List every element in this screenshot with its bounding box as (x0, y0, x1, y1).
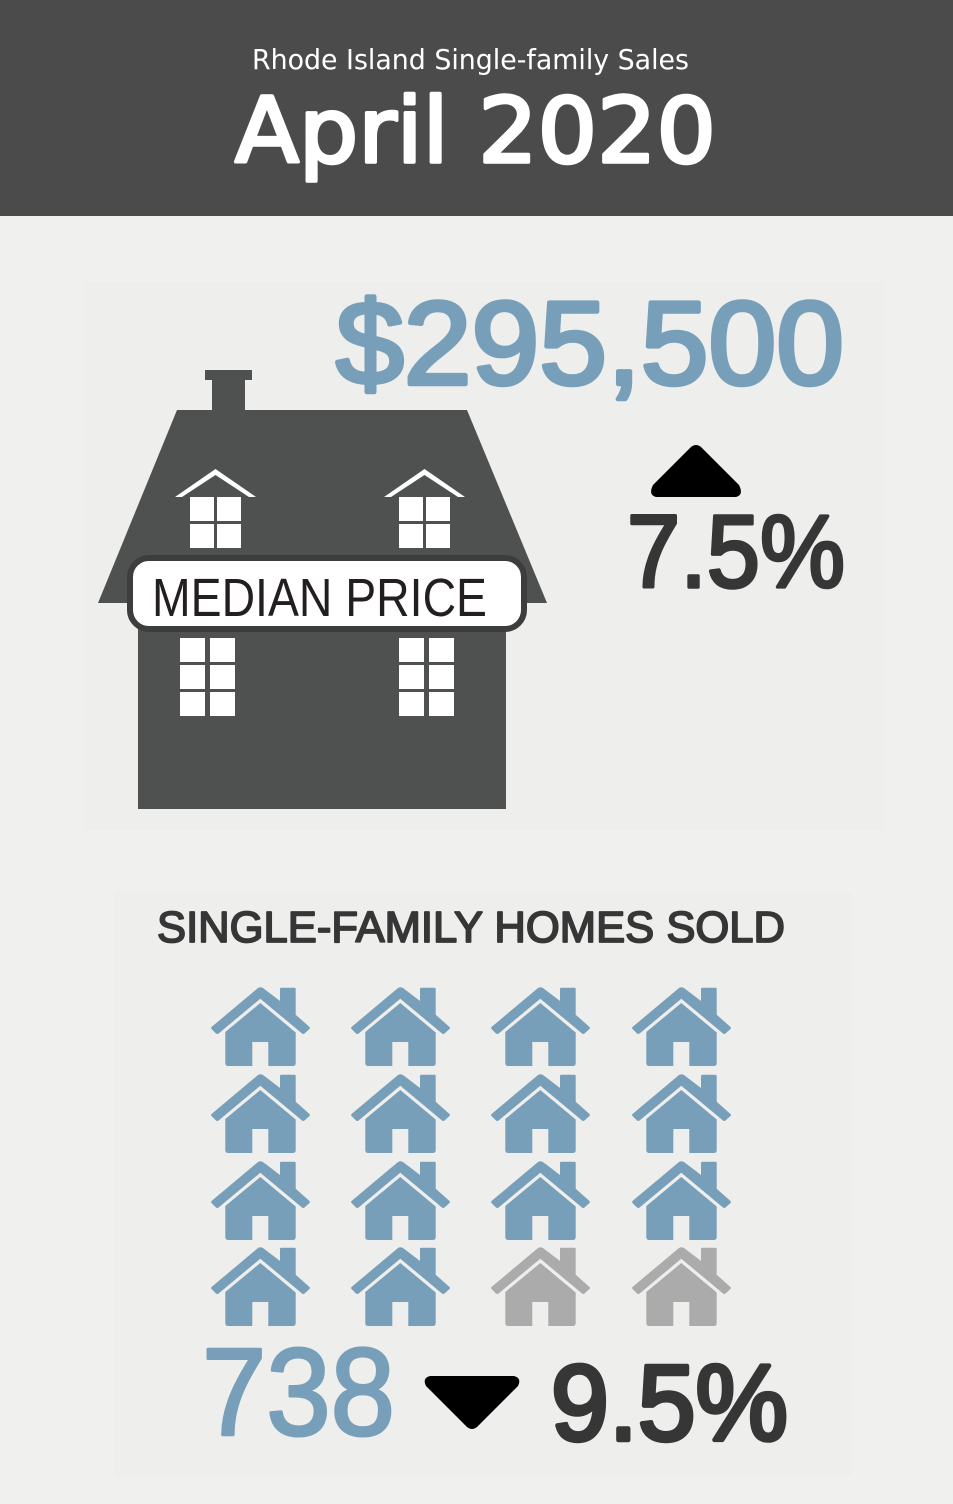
heading: SINGLE-FAMILY HOMES SOLD (157, 903, 785, 952)
arrow down (425, 1376, 519, 1429)
sales change: 9.5% (551, 1342, 788, 1463)
arrow up (651, 445, 741, 497)
median price value: $295,500 (336, 278, 844, 410)
header banner (0, 0, 953, 216)
homes sold value: 738 (202, 1324, 395, 1462)
title: April 2020 (235, 79, 716, 184)
price change: 7.5% (627, 494, 845, 609)
subtitle: Rhode Island Single-family Sales (252, 43, 689, 76)
panel: median price (84, 278, 884, 830)
panel: homes sold (114, 892, 852, 1476)
house pictogram (211, 987, 731, 1326)
icon: large house (98, 370, 547, 809)
label: median price: MEDIAN PRICE (152, 568, 487, 628)
